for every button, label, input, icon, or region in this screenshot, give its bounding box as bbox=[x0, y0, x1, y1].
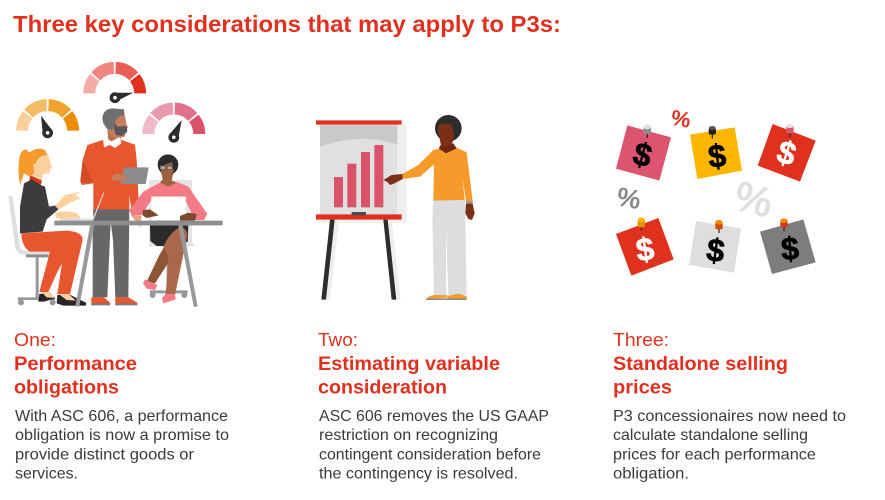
price tag: red, white dollar bbox=[758, 124, 816, 182]
table bbox=[54, 221, 223, 307]
text block: one bbox=[14, 329, 229, 482]
text block: three: P3 concessionaires now need to bbox=[613, 408, 846, 425]
text block: three bbox=[613, 329, 846, 482]
woman in black and orange bbox=[18, 149, 104, 306]
price tag: dark grey bbox=[760, 218, 816, 274]
percent sign: red: % bbox=[669, 105, 693, 133]
text block: two: consideration bbox=[318, 376, 447, 398]
price tag: dark grey: $ bbox=[780, 230, 800, 267]
text block: two: contingent consideration before bbox=[319, 446, 541, 464]
presenter bbox=[383, 115, 475, 300]
seated woman in pink bbox=[129, 154, 207, 303]
text block: two bbox=[318, 329, 549, 482]
illustration: presenter at flip chart bbox=[316, 115, 475, 300]
text block: three: Standalone selling bbox=[613, 353, 788, 375]
text block: one: obligations bbox=[14, 376, 119, 398]
text block: one: Performance bbox=[14, 353, 137, 375]
man standing bbox=[80, 108, 149, 305]
text block: three: calculate standalone selling bbox=[613, 427, 808, 444]
price tag: pink: $ bbox=[629, 135, 656, 174]
text block: three: obligation. bbox=[613, 466, 689, 482]
price tag: light grey bbox=[689, 220, 741, 273]
price tag: pink bbox=[616, 125, 671, 181]
seated woman's chair bbox=[8, 195, 68, 305]
text block: one: With ASC 606, a performance bbox=[15, 408, 228, 425]
percent sign: light grey: % bbox=[729, 172, 778, 228]
price tag: red, lower left bbox=[616, 218, 674, 276]
price tag: yellow: $ bbox=[706, 137, 728, 175]
people at table bbox=[8, 108, 223, 307]
price tag: light grey: $ bbox=[704, 231, 727, 269]
title: Three key considerations that may apply to P3s: bbox=[13, 11, 561, 37]
illustration: team with performance gauges bbox=[8, 68, 223, 307]
text block: two: restriction on recognizing bbox=[319, 427, 498, 444]
text block: one: services. bbox=[15, 466, 78, 482]
icon: red gauge bbox=[89, 68, 140, 103]
text block: one: provide distinct goods or bbox=[15, 446, 194, 464]
percent sign: grey: % bbox=[615, 181, 643, 215]
text block: two: Estimating variable bbox=[318, 353, 500, 375]
text block: one: One: bbox=[14, 329, 56, 350]
text block: three: prices for each performance bbox=[613, 446, 816, 464]
second chair bbox=[149, 180, 194, 298]
text block: three: prices bbox=[613, 376, 672, 398]
text block: two: ASC 606 removes the US GAAP bbox=[319, 408, 549, 425]
icon: pink gauge bbox=[148, 108, 199, 143]
text block: two: Two: bbox=[318, 329, 358, 350]
text block: two: the contingency is resolved. bbox=[319, 466, 518, 482]
illustration: price tags and percent signs bbox=[615, 105, 816, 276]
icon: orange gauge bbox=[22, 105, 73, 138]
price tag: yellow bbox=[690, 126, 742, 179]
price tag: red, lower left: $ bbox=[634, 230, 657, 268]
text block: one: obligation is now a promise to bbox=[15, 427, 229, 444]
text block: three: Three: bbox=[613, 329, 669, 350]
bar chart bbox=[334, 145, 383, 207]
easel bbox=[316, 120, 407, 300]
price tag: red, white dollar: $ bbox=[773, 133, 801, 173]
